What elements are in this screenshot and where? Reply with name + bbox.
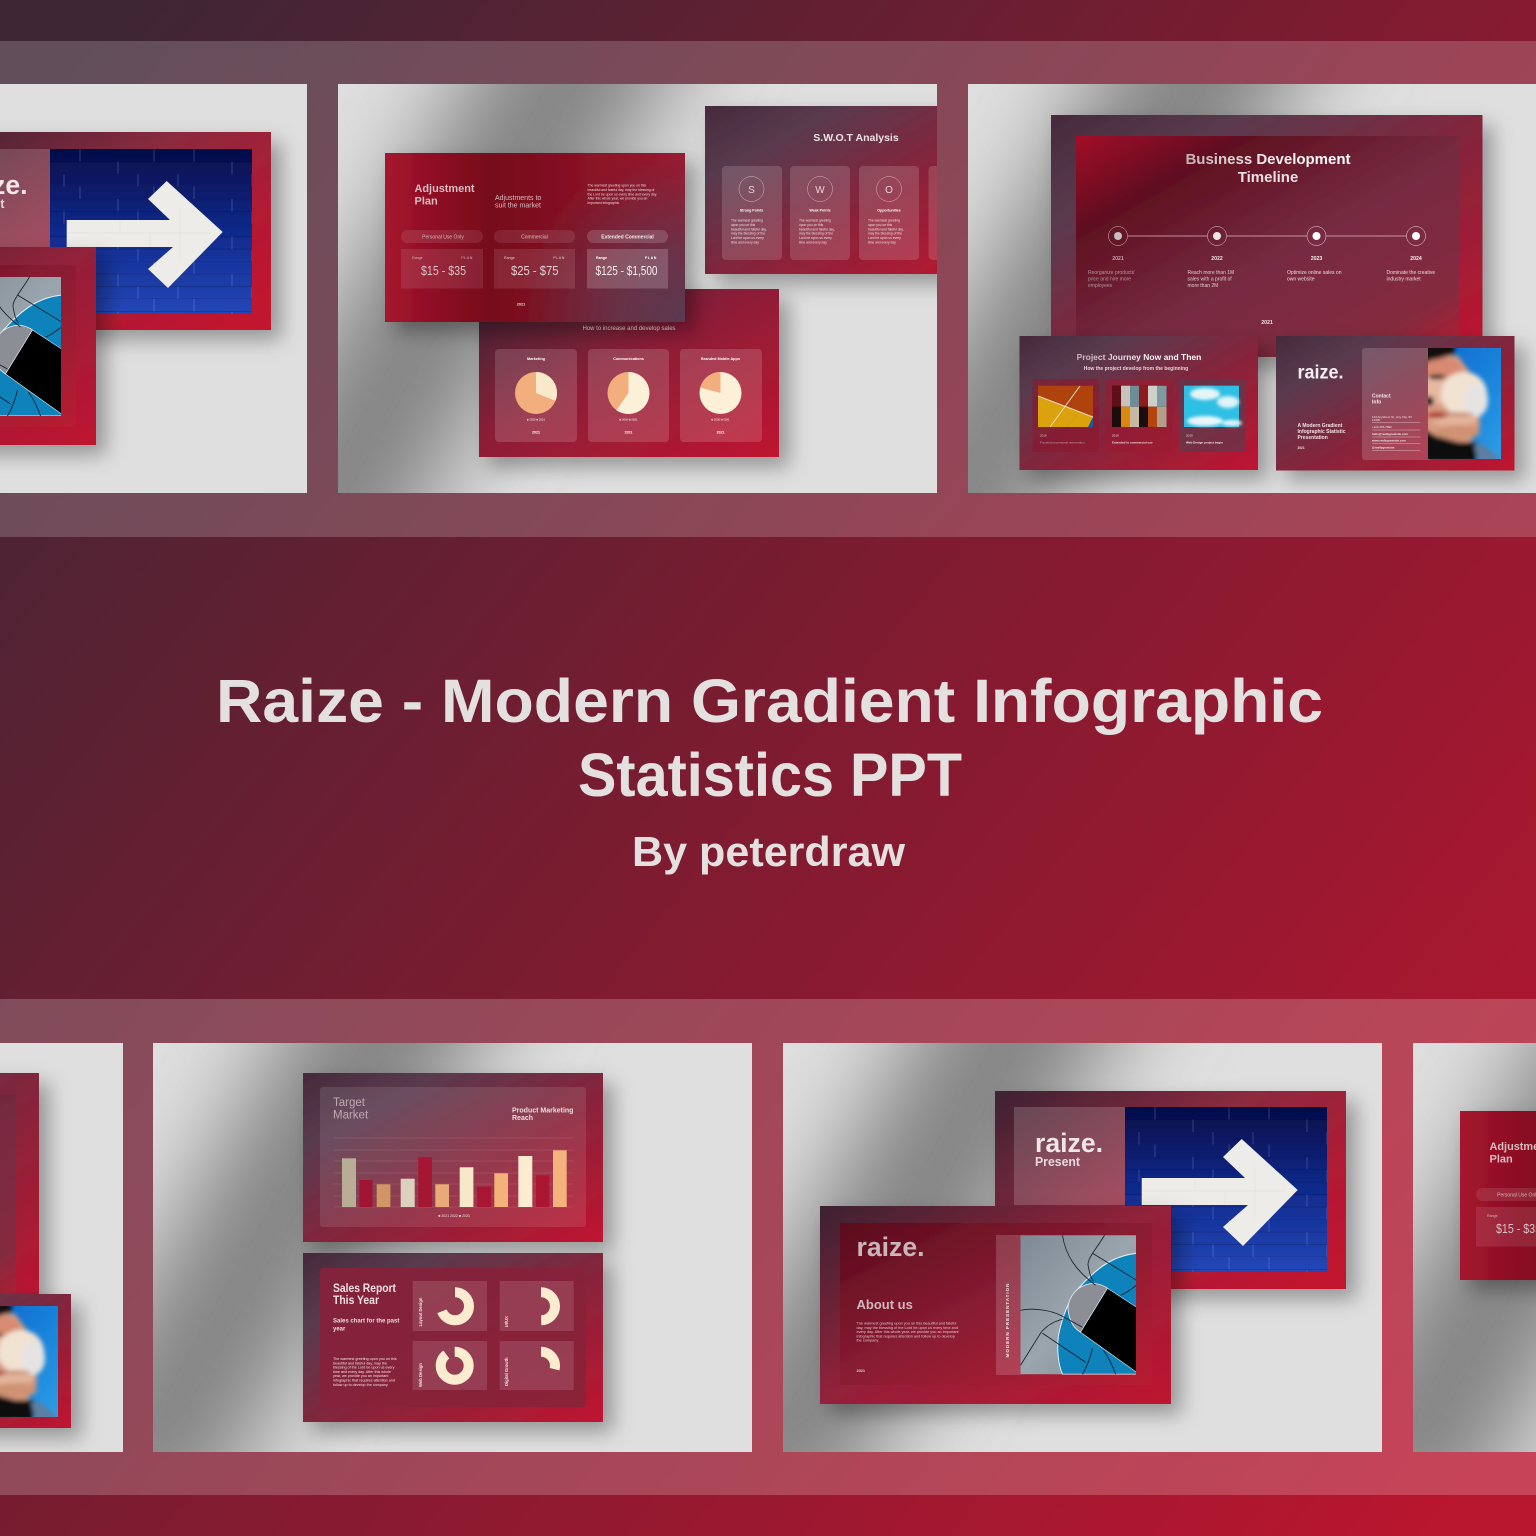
contact details: Info <box>1372 400 1381 406</box>
slide: about us: MODERN PRESENTATION <box>1005 1283 1010 1357</box>
slide: raize contact info: raize. <box>1298 362 1344 384</box>
card: weak points: may the blessing of the <box>799 232 833 236</box>
card: opportunities: may the blessing of the <box>868 232 902 236</box>
card: opportunities: beautiful and fateful day, <box>868 227 904 231</box>
card: communications pie: 2021 <box>624 430 632 434</box>
pricing: commercial: Commercial <box>521 234 548 240</box>
card: marketing pie: ■ 2020 ■ 2021 <box>527 418 546 422</box>
card: communications pie: ■ 2020 ■ 2021 <box>619 418 638 422</box>
pricing: commercial <box>494 230 575 288</box>
bottom lighter band <box>0 999 1536 1495</box>
slide: sales report: follow up to develop the company. <box>333 1383 388 1387</box>
timeline node 2021: price and hire more <box>1088 276 1131 282</box>
timeline node 2021: Reorganize products' <box>1088 270 1135 276</box>
card: branded mobile apps pie: Branded Mobile Apps <box>701 357 740 361</box>
slide: sales report <box>303 1253 603 1422</box>
pricing: commercial: $25 - $75 <box>511 264 559 278</box>
slide: target market chart: Product Marketing <box>512 1108 573 1114</box>
slide: adjustment plan: Adjustments to <box>495 195 541 202</box>
contact details <box>1371 394 1420 450</box>
slide: adjustment plan (cropped): Range <box>1487 1214 1498 1218</box>
card: marketing pie: Marketing <box>527 357 546 361</box>
slide: adjustment plan: Adjustment <box>414 183 475 195</box>
slide: raize contact info <box>1276 336 1514 470</box>
timeline node 2021 <box>1088 226 1135 289</box>
slide: adjustment plan: beautiful and fateful day, may the blessing of <box>588 188 654 192</box>
pricing: personal use: Range <box>412 256 423 260</box>
journey card 2020 <box>1179 379 1246 452</box>
top lighter band <box>0 41 1536 537</box>
card: strong points: may the blessing of the <box>731 232 765 236</box>
panel: adjustment, SWOT and sales slides <box>338 84 937 493</box>
slide: target market chart <box>303 1073 603 1242</box>
slide: adjustment plan: important infographic. <box>588 201 620 205</box>
panel: target market and sales report slides <box>7 832 752 1530</box>
slide: about us: 2021 <box>856 1369 865 1373</box>
card: weak points <box>790 166 850 260</box>
timeline node 2022: 2022 <box>1211 256 1223 262</box>
byline: By peterdraw <box>632 828 905 875</box>
card: marketing pie <box>495 349 577 442</box>
contact details: @reallygreatsite <box>1372 446 1395 450</box>
timeline node 2022 <box>1188 226 1234 289</box>
timeline node 2024 <box>1386 226 1435 282</box>
slide: contact (cropped) <box>0 1294 71 1428</box>
journey card 2019 commercial: Extended to commercial use <box>1112 440 1153 444</box>
slide: raize contact info: Infographic Statistic <box>1298 429 1346 435</box>
card: weak points: The warmest greeting <box>799 218 831 222</box>
slide: sales report: year <box>333 1326 346 1332</box>
journey card 2019 commercial <box>1106 379 1172 452</box>
slide: about us: raize. <box>856 1232 924 1262</box>
card: strong points: beautiful and fateful day, <box>731 227 767 231</box>
card: weak points: W <box>815 185 825 196</box>
timeline node 2024: Dominate the creative <box>1386 270 1435 276</box>
title block <box>216 667 1323 875</box>
slide: adjustment plan: the Lord be upon us every time and every day. <box>588 192 657 196</box>
card: branded mobile apps pie <box>680 349 762 442</box>
slide: about us: infographic that requires attention and follow up to develop <box>856 1334 955 1338</box>
card: strong points: Lord be upon us every <box>731 236 764 240</box>
journey card 2018: Focused on personal use product <box>1040 440 1085 444</box>
contact details: 12345 <box>1372 418 1380 422</box>
timeline node 2023: 2023 <box>1311 256 1322 262</box>
slide: about us (cropped) <box>0 247 96 445</box>
pricing: commercial: PLAN <box>553 256 565 260</box>
slide: about us <box>820 1206 1171 1404</box>
slide: how to increase and develop sales: How to increase and develop sales <box>582 326 676 332</box>
slide: business development timeline: 2021 <box>1261 320 1273 326</box>
card: strong points: The warmest greeting <box>731 218 763 222</box>
card: strong points: time and every day <box>731 240 759 244</box>
slide: adjustment plan: Plan <box>414 196 438 208</box>
journey card 2020: 2020 <box>1186 434 1193 438</box>
donut: UI/UX: UI/UX <box>504 1316 509 1327</box>
slide: raize present <box>995 1091 1346 1289</box>
card: strong points: S <box>748 185 755 196</box>
card: opportunities: upon you on this <box>868 223 893 227</box>
slide: sales report: This Year <box>333 1295 379 1307</box>
donut: digital growth <box>500 1341 574 1390</box>
slide: target market chart: Market <box>333 1110 369 1122</box>
slide: sales report: year, we provide you an important <box>333 1374 388 1378</box>
slide: about us: the company. <box>856 1339 879 1343</box>
slide: about us: The warmest greeting upon you on this beautiful and fateful <box>856 1322 956 1326</box>
slide: adjustment plan (cropped): Plan <box>1490 1154 1513 1166</box>
timeline node 2024: industry market <box>1386 276 1421 282</box>
slide: adjustment plan <box>385 153 685 322</box>
slide: sales report: The warmest greeting upon you on this <box>333 1357 397 1361</box>
slide: project journey: How the project develop from the beginning <box>1084 366 1188 372</box>
contact details: +123-456-7890 <box>1372 425 1392 429</box>
title line 2: Statistics PPT <box>578 741 962 809</box>
slide: sales report: Sales Report <box>333 1283 396 1295</box>
journey card 2018: 2018 <box>1040 434 1047 438</box>
contact details: Contact <box>1372 394 1391 400</box>
card: weak points: upon you on this <box>799 223 824 227</box>
slide: raize present (cropped) <box>0 132 271 330</box>
card: strong points: upon you on this <box>731 223 756 227</box>
slide: sales report: time and every day. After this whole <box>333 1370 391 1374</box>
panel: arrow and about slides <box>637 832 1382 1530</box>
card: opportunities: The warmest greeting <box>868 218 900 222</box>
card: communications pie <box>588 349 669 442</box>
pricing: extended commercial: PLAN <box>645 256 657 260</box>
slide: adjustment plan: suit the market <box>495 202 541 210</box>
pricing: extended commercial: $125 - $1,500 <box>596 264 658 278</box>
card: opportunities: time and every day <box>868 240 896 244</box>
timeline node 2023: Optimize online sales on <box>1287 270 1342 276</box>
title line 1: Raize - Modern Gradient Infographic <box>216 667 1323 735</box>
slide: sales report: blessing of the Lord be upon us every <box>333 1366 395 1370</box>
journey card 2018 <box>1032 379 1099 452</box>
panel: bottom-left timeline and contact crop <box>0 1043 123 1452</box>
donut: web design <box>413 1341 487 1390</box>
panel: timeline, journey and contact slides <box>968 84 1536 493</box>
slide: about us: About us <box>856 1297 913 1312</box>
card: weak points: time and every day <box>799 240 827 244</box>
slide: adjustment plan: After this whole year, we provide you an <box>588 197 648 201</box>
card: marketing pie: 2021 <box>532 430 540 434</box>
slide: timeline (cropped) <box>0 1073 39 1315</box>
journey card 2020: Web Design project begin <box>1186 440 1223 444</box>
card: branded mobile apps pie: 2021 <box>716 430 724 434</box>
pricing: extended commercial <box>587 230 668 288</box>
card: opportunities: Opportunities <box>877 208 901 212</box>
slide: about us: every day. After this whole year, we provide you an important <box>856 1330 960 1334</box>
slide: adjustment plan: 2021 <box>517 302 525 306</box>
timeline node 2022: more than 2M <box>1188 283 1218 289</box>
donut: UI/UX <box>500 1281 574 1331</box>
slide: raize contact info: A Modern Gradient <box>1298 423 1343 429</box>
pricing: extended commercial: Range <box>596 256 607 260</box>
slide: sales report: infographic that requires attention and <box>333 1378 395 1382</box>
timeline node 2024: 2024 <box>1410 256 1422 262</box>
card: opportunities <box>859 166 919 260</box>
pricing: commercial: Range <box>504 256 515 260</box>
slide: how to increase and develop sales <box>479 289 779 457</box>
slide: target market chart: Reach <box>512 1115 533 1122</box>
timeline node 2022: sales with a profit of <box>1188 276 1232 282</box>
card: opportunities: Lord be upon us every <box>868 236 901 240</box>
slide: business development timeline: Business Development <box>1185 151 1351 168</box>
donut: web design: Web Design <box>418 1363 423 1387</box>
contact details: www.reallygreatsite.com <box>1371 438 1406 442</box>
pricing: personal use: $15 - $35 <box>421 264 466 278</box>
contact details: 123 Anywhere St., Any City, ST <box>1372 415 1412 419</box>
slide: raize contact info: 2021 <box>1298 446 1305 450</box>
pricing: personal use: PLAN <box>461 256 473 260</box>
contact details: hello@reallygreatsite.com <box>1372 432 1408 436</box>
bar chart <box>342 1150 567 1207</box>
slide: adjustment plan (cropped) <box>1460 1111 1536 1280</box>
slide: raize contact info: Presentation <box>1298 435 1328 441</box>
slide: S.W.O.T analysis <box>703 104 937 296</box>
panel: bottom-right adjustment crop <box>1267 832 1536 1530</box>
slide: adjustment plan: The warmest greeting upon you on this <box>588 184 646 188</box>
slide: target market chart: Target <box>333 1097 366 1109</box>
card: strong points <box>722 166 782 260</box>
slide: business development timeline <box>1051 115 1482 357</box>
card: weak points: Lord be upon us every <box>799 236 832 240</box>
card: communications pie: Communications <box>613 357 644 361</box>
pricing: extended commercial: Extended Commercial <box>601 234 654 240</box>
timeline node 2021: 2021 <box>1112 256 1124 262</box>
panel: top-left arrow and about slides <box>0 84 307 493</box>
card: branded mobile apps pie: ■ 2020 ■ 2021 <box>711 418 730 422</box>
donut: layout design <box>413 1281 487 1331</box>
timeline node 2023 <box>1287 226 1342 282</box>
pricing: personal use: Personal Use Only <box>422 234 464 240</box>
slide: sales report: Sales chart for the past <box>333 1318 399 1324</box>
donut: digital growth: Digital Growth <box>504 1357 509 1386</box>
slide: raize present: Present <box>1035 1154 1081 1169</box>
card: strong points: Strong Points <box>740 208 763 212</box>
slide: project journey: Project Journey Now and Then <box>1077 352 1201 362</box>
journey card 2019 commercial: 2019 <box>1112 434 1119 438</box>
card: opportunities: O <box>885 185 893 196</box>
timeline node 2022: Reach more than 1M <box>1188 270 1234 276</box>
pricing: personal use <box>401 230 483 288</box>
timeline node 2021: employees <box>1088 283 1113 289</box>
slide: raize present: raize. <box>1035 1128 1103 1158</box>
slide: business development timeline: Timeline <box>1238 169 1298 186</box>
chart legend: ■ 2021 2022 ■ 2023 <box>438 1214 470 1218</box>
slide: sales report: beautiful and fateful day, may the <box>333 1361 387 1365</box>
donut: layout design: Layout Design <box>418 1297 423 1326</box>
slide: about us: day, may the blessing of the Lord be upon us every time and <box>856 1326 958 1330</box>
timeline node 2023: own website <box>1287 276 1315 282</box>
slide: project journey <box>1020 336 1258 470</box>
card: weak points: Weak Points <box>809 208 831 212</box>
slide: S.W.O.T analysis: S.W.O.T Analysis <box>813 132 899 144</box>
card: weak points: beautiful and fateful day, <box>799 227 835 231</box>
